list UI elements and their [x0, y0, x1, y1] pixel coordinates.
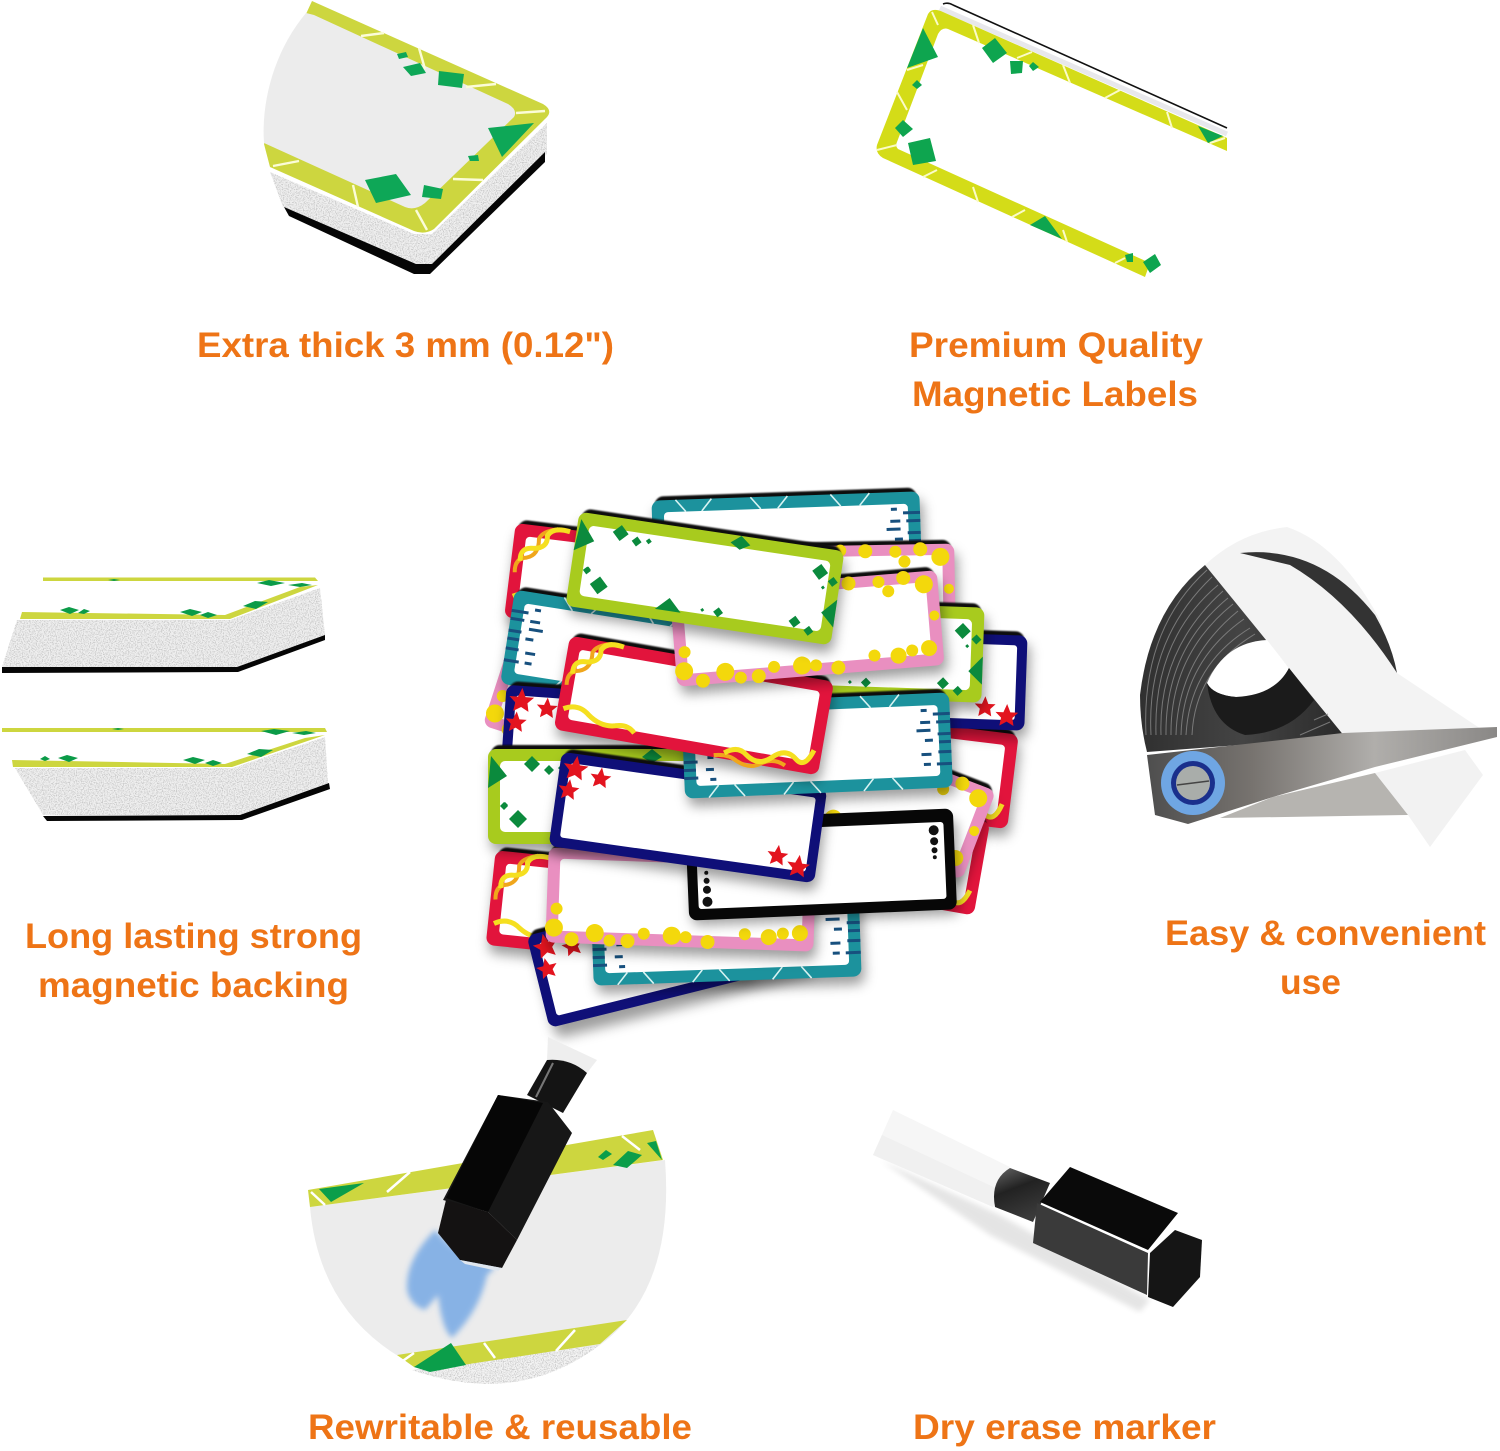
red label lower right [709, 772, 991, 918]
blue ink smear [407, 1230, 495, 1338]
upper scissors blade [1147, 727, 1497, 824]
photo: magnetic tape roll with scissors [1140, 527, 1497, 847]
marker cap [443, 1095, 572, 1240]
red label right [740, 698, 1022, 837]
heading: easy and convenient [1165, 914, 1486, 1002]
black label [685, 808, 960, 926]
roll hole [1207, 640, 1289, 697]
heading: easy and convenient: Easy & convenient [1165, 914, 1486, 953]
lower scissors blade [1220, 773, 1408, 818]
marker cap [1033, 1203, 1148, 1295]
grey round surface [310, 1160, 666, 1380]
heading: extra thick: Extra thick 3 mm (0.12") [197, 326, 614, 365]
marker neck [527, 1060, 587, 1113]
lime frame [877, 10, 1227, 277]
green diamonds [365, 52, 534, 203]
navy label bottom [526, 866, 816, 1040]
foam layer [270, 123, 547, 264]
heading: magnetic backing: magnetic backing [38, 966, 349, 1005]
pink label bottom [544, 843, 820, 960]
lime border [264, 1, 549, 233]
lower tape piece [1375, 750, 1483, 847]
heading: rewritable: Rewritable & reusable [308, 1408, 692, 1447]
teal label back [651, 487, 926, 604]
teal label middle [681, 688, 956, 807]
marker felt tip [438, 1200, 517, 1268]
panel: magnetic backing strips [2, 578, 330, 821]
heading: dry erase marker: Dry erase marker [913, 1408, 1216, 1447]
teal label left [499, 586, 783, 734]
teal label bottom [590, 877, 865, 994]
green label right [713, 594, 988, 711]
green label front [564, 508, 848, 654]
pink label front [668, 566, 948, 695]
photo: dry erase marker [873, 1110, 1202, 1312]
marker barrel [547, 1037, 597, 1073]
top lime band [308, 1130, 663, 1207]
roll body [1140, 565, 1345, 752]
tape white arc [1205, 527, 1490, 736]
green diamonds [895, 28, 1223, 273]
heading: magnetic backing: Long lasting strong [25, 917, 362, 956]
upper dark roll segment [1240, 552, 1397, 673]
foam bottom [412, 1345, 600, 1384]
marker neck [994, 1168, 1050, 1222]
green label left [488, 745, 759, 852]
heading: premium quality [909, 326, 1204, 414]
upper strip [2, 578, 325, 673]
heading: premium quality: Premium Quality [909, 326, 1204, 365]
heading: easy and convenient: use [1280, 963, 1341, 1002]
navy label mid left [499, 681, 777, 806]
felt tip [1148, 1230, 1202, 1307]
heading: premium quality: Magnetic Labels [912, 375, 1198, 414]
lower strip [2, 728, 330, 821]
navy label right [756, 622, 1031, 739]
grey writing surface [264, 13, 515, 208]
scissors pivot screw [1161, 751, 1225, 815]
photo: pile of coloured magnetic labels [481, 487, 1031, 1040]
marker shadow [880, 1160, 1150, 1312]
navy label front [548, 748, 831, 892]
red label top left [503, 519, 785, 658]
heading: magnetic backing [25, 917, 362, 1005]
red label lower left [485, 846, 766, 981]
red label front [552, 632, 838, 784]
magnetic black backing [284, 152, 545, 274]
panel: premium quality label frame [877, 3, 1227, 277]
bottom lime band [397, 1320, 627, 1370]
pink label sliver [481, 631, 768, 811]
pink label tilted right [708, 691, 1000, 888]
marker barrel [873, 1110, 1010, 1207]
panel: thick label corner illustration [264, 1, 549, 274]
pink label back [685, 540, 959, 651]
black edge line [943, 3, 1227, 128]
panel: rewritable surface with eraser [308, 1037, 666, 1384]
